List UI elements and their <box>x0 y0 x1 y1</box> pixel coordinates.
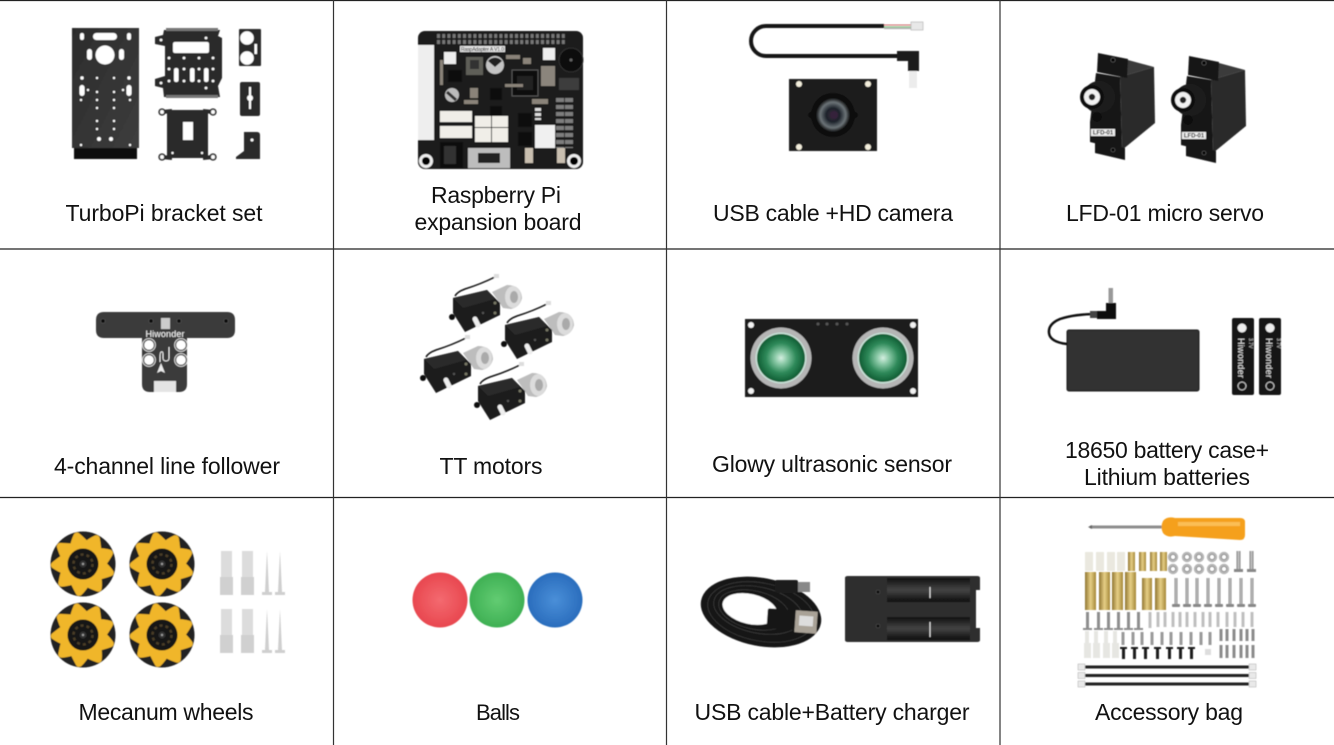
icon: coiled USB cable <box>695 567 827 657</box>
icon: hardware assortment <box>1083 551 1256 659</box>
icon: two servos: LFD-01 <box>1093 130 1114 136</box>
icon: two servos: LFD-01 <box>1184 134 1205 140</box>
label: USB cable +HD camera: USB cable +HD camera <box>713 200 953 226</box>
icon: USB cable <box>751 22 923 88</box>
icon: bracket plates <box>72 28 261 160</box>
icon: screwdriver <box>1088 517 1245 540</box>
label: Glowy ultrasonic sensor: Glowy ultrasonic sensor <box>712 451 952 477</box>
label: Raspberry Pi expansion board <box>414 182 582 235</box>
icon: two lithium batteries: Hiwonder <box>1236 338 1246 378</box>
panel: USB cable + HD camera <box>713 22 953 226</box>
label: Balls: Balls <box>476 700 520 725</box>
icon: expansion board <box>418 31 583 169</box>
icon: line follower board: Hiwonder <box>146 329 184 339</box>
label: Mecanum wheels: Mecanum wheels <box>78 699 254 725</box>
label: TurboPi bracket set: TurboPi bracket set <box>66 200 263 226</box>
icon: two lithium batteries: Hiwonder <box>1264 338 1274 378</box>
icon: couplings and pins <box>220 551 285 653</box>
icon: ultrasonic sensor <box>745 319 918 397</box>
label: Accessory bag: Accessory bag <box>1095 699 1243 725</box>
panel: USB cable + battery charger <box>694 567 980 725</box>
label: LFD-01 micro servo: LFD-01 micro servo <box>1066 200 1264 226</box>
icon: two lithium batteries <box>1232 318 1281 395</box>
icon: battery charger <box>845 576 980 642</box>
icon: four TT motors <box>420 274 574 420</box>
icon: line follower board <box>96 312 235 392</box>
label: Raspberry Pi expansion board: Raspberry Pi <box>431 182 561 208</box>
icon: two lithium batteries: 3.7V <box>1275 338 1281 349</box>
panel: Balls <box>412 572 582 725</box>
label: Raspberry Pi expansion board: expansion board <box>414 209 582 235</box>
icon: red, green and blue balls <box>412 572 582 628</box>
label: 18650 battery case + Lithium batteries <box>1065 437 1269 490</box>
icon: battery case with cable <box>1049 288 1199 391</box>
icon: four mecanum wheels <box>50 531 196 669</box>
label: 18650 battery case + Lithium batteries: 18650 battery case+ <box>1065 437 1269 463</box>
panel: 18650 battery case + lithium batteries <box>1049 288 1281 490</box>
icon: two servos <box>1080 53 1246 163</box>
label: 4-channel line follower: 4-channel line follower <box>54 453 280 479</box>
icon: HD camera module <box>789 79 877 151</box>
panel: Raspberry Pi expansion board <box>414 31 583 235</box>
panel: 4-channel line follower <box>54 312 280 479</box>
label: 18650 battery case + Lithium batteries: Lithium batteries <box>1084 464 1250 490</box>
icon: two lithium batteries: 3.7V <box>1247 338 1253 349</box>
label: USB cable+Battery charger: USB cable+Battery charger <box>694 699 970 725</box>
icon: three wire cables <box>1078 664 1256 687</box>
icon: expansion board: RaspAdapter A V1.0 <box>461 47 504 53</box>
panel: Mecanum wheels <box>50 531 285 725</box>
label: TT motors: TT motors <box>440 453 542 479</box>
panel: TT motors <box>420 274 574 479</box>
panel: LFD-01 micro servo <box>1066 53 1264 226</box>
panel: Accessory bag <box>1078 517 1256 725</box>
panel: Glowy ultrasonic sensor <box>712 319 952 477</box>
panel: TurboPi bracket set <box>66 28 263 226</box>
